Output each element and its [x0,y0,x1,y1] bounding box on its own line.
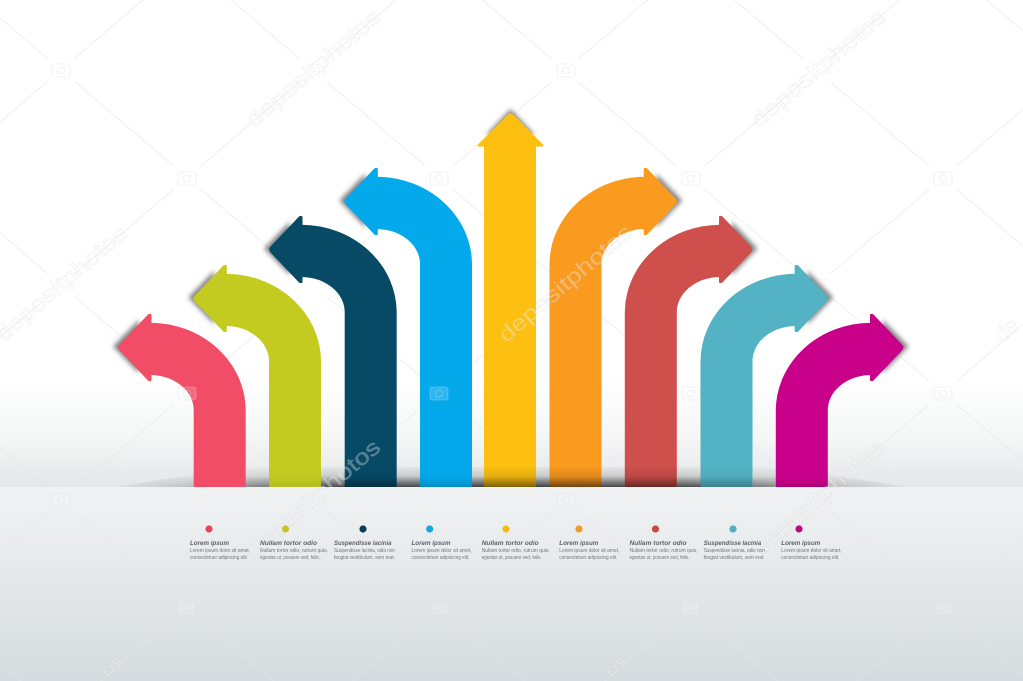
legend item 5: egestas ut, posuere sed, felis. [482,555,542,561]
legend item 6: consectetuer adipiscing elit. [559,555,617,561]
watermark text: depositphotos [493,219,637,347]
legend item 8: feugiat vestibulum, sem erat. [704,555,765,561]
legend item 7: Nullam tortor odio, rutrum quis, [630,548,698,554]
watermark text: depositphotos [241,4,385,132]
legend item 5: Nullam tortor odio, rutrum quis, [482,548,550,554]
shading at the foot of the arrows [269,466,828,487]
legend item 1: consectetuer adipiscing elit. [190,555,248,561]
legend item 9: Lorem ipsum dolor sit amet, [781,548,841,554]
legend item 2 [260,525,328,561]
legend item 6: Lorem ipsum dolor sit amet, [559,548,619,554]
legend item 7: egestas ut, posuere sed, felis. [630,555,690,561]
legend item 5: Nullam tortor odio [482,540,539,547]
legend item 4: Lorem ipsum [412,540,451,547]
legend item 7: Nullam tortor odio [630,540,686,547]
base shadow behind the arrows [116,467,907,487]
legend item 1 [190,525,250,561]
legend item 5 [482,525,550,561]
arrow 4: blue, pointing left [339,169,471,486]
arrow 3: navy, pointing left [264,217,396,486]
legend item 4: consectetuer adipiscing elit. [412,555,470,561]
legend item 9: consectetuer adipiscing elit. [781,555,839,561]
legend item 3: Suspendisse lacinia [334,540,392,547]
background: upper white area [0,0,1023,487]
legend item 2: egestas ut, posuere sed, felis. [260,555,320,561]
watermark camera icons [52,64,952,615]
legend item 8 [704,525,765,561]
legend item 7 [630,525,698,561]
legend item 2: Nullam tortor odio [260,540,317,547]
arrow 8: teal, pointing right [702,266,833,486]
arrow 6: orange, pointing right [550,169,682,486]
arrow 5: yellow, pointing up [478,109,542,486]
legend item 3 [334,525,395,561]
legend item 4: Lorem ipsum dolor sit amet, [412,548,472,554]
arrow 2: lime, pointing left [188,266,320,486]
legend item 4 [412,525,472,561]
legend item 3: Suspendisse lacinia, odio non [334,548,395,554]
legend item 6: Lorem ipsum [559,540,598,547]
legend item 9 [781,525,841,561]
arrow 9: magenta, pointing right [777,315,908,486]
legend item 1: Lorem ipsum [190,540,229,547]
legend item 9: Lorem ipsum [781,540,820,547]
watermark text: depositphotos [746,434,890,562]
arrow 7: red, pointing right [626,217,758,486]
arrow 1: pink, pointing left [113,315,245,486]
legend item 6 [559,525,619,561]
legend item 2: Nullam tortor odio, rutrum quis, [260,548,328,554]
watermark text: de [989,312,1023,347]
legend item 3: feugiat vestibulum, sem erat. [334,555,395,561]
watermark text: depositphotos [746,4,890,132]
legend item 8: Suspendisse lacinia [704,540,761,547]
legend item 1: Lorem ipsum dolor sit amet, [190,548,250,554]
background: lower grey panel [0,487,1023,681]
legend item 8: Suspendisse lacinia, odio non [704,548,765,554]
watermark text: depositphotos [241,434,385,562]
